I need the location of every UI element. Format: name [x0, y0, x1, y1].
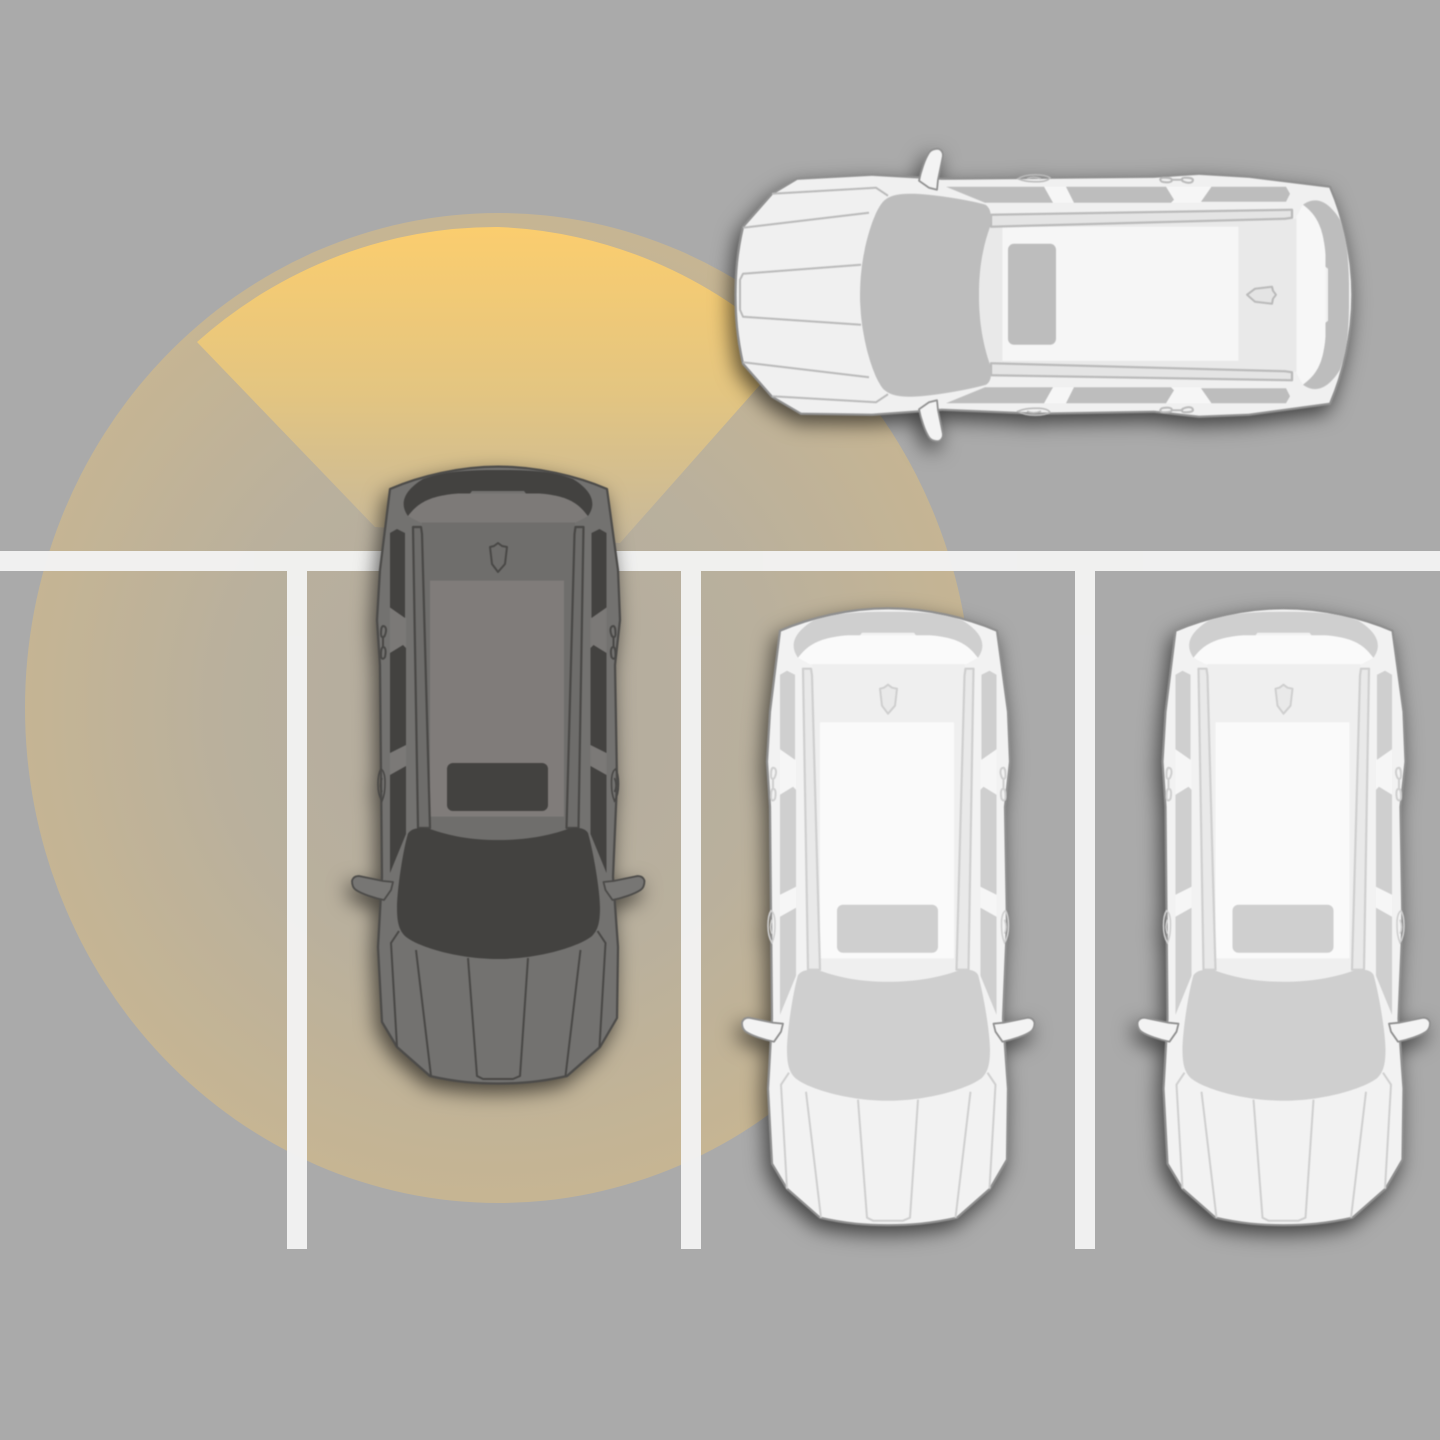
top car body [736, 174, 1352, 417]
sensor detection zone [25, 213, 972, 1203]
right car roof antenna [1276, 685, 1292, 714]
dark car body [377, 467, 620, 1084]
top car windshield [860, 194, 991, 397]
right car windshield [1182, 970, 1386, 1101]
middle car rear window [794, 612, 982, 658]
middle car body [767, 608, 1010, 1225]
dark car side windows, rails and mirrors [352, 527, 644, 1076]
top car bonnet lines [740, 265, 861, 325]
middle car roof [798, 635, 978, 982]
top car sunroof [1008, 244, 1056, 345]
right car sunroof [1232, 905, 1334, 953]
parked car: dark reversing vehicle [352, 467, 644, 1084]
parked car: white vehicle in middle bay [742, 608, 1034, 1225]
middle car sunroof [837, 905, 938, 953]
top car side windows, rails and mirrors [743, 149, 1292, 441]
top car roof antenna [1247, 287, 1276, 304]
parking bay lines [0, 551, 1440, 1249]
dark car rear window [404, 470, 592, 516]
middle car bonnet lines [858, 1100, 918, 1221]
right car bonnet lines [1254, 1100, 1314, 1221]
dark car windshield [397, 828, 600, 959]
dark car roof antenna [490, 543, 507, 572]
right car roof [1194, 635, 1374, 982]
right car side windows, rails and mirrors [1138, 669, 1430, 1218]
dark car sunroof [447, 763, 548, 811]
parked car: white vehicle in right bay [1138, 608, 1430, 1225]
crossing car: white vehicle passing behind [736, 149, 1352, 441]
top car rear window [1303, 200, 1349, 389]
middle car roof antenna [880, 685, 897, 714]
dark car roof [408, 494, 588, 840]
middle car side windows, rails and mirrors [742, 669, 1034, 1218]
right car rear window [1189, 612, 1378, 658]
right car body [1162, 608, 1406, 1225]
top car roof [979, 205, 1326, 385]
highlighted rear detection cone [197, 227, 790, 543]
middle car windshield [787, 970, 990, 1101]
dark car bonnet lines [468, 958, 528, 1079]
